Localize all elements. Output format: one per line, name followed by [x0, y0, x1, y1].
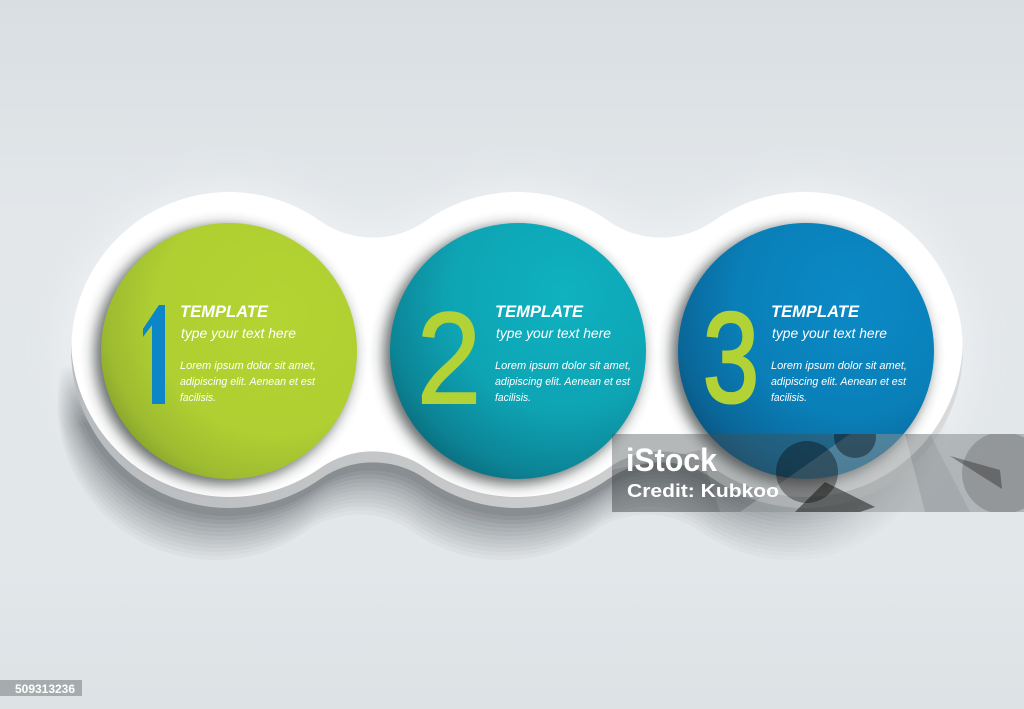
watermark shards — [612, 434, 1024, 512]
panel face — [60, 180, 980, 497]
step 3 body — [771, 360, 907, 404]
watermark band — [612, 434, 1024, 512]
credit text: Credit: Kubkoo — [627, 481, 779, 501]
step 2 circle — [384, 223, 646, 484]
step 2 body: Lorem ipsum dolor sit amet, — [495, 360, 631, 372]
circle shadow — [384, 226, 642, 484]
step 1 heading: TEMPLATE — [180, 303, 269, 321]
white connected panel — [60, 180, 980, 508]
image id tag — [0, 680, 82, 696]
step 2 body — [495, 360, 631, 404]
panel edge — [71, 192, 963, 508]
step 1 body: facilisis. — [180, 392, 216, 404]
circle shadow — [95, 226, 353, 484]
tag background — [0, 680, 82, 696]
tag number: 509313236 — [15, 684, 75, 696]
step 3 body: facilisis. — [771, 392, 807, 404]
step 1 body — [180, 360, 316, 404]
number 2: 2 — [417, 285, 481, 431]
blue disc — [678, 223, 934, 479]
teal disc — [390, 223, 646, 479]
step 1 body: Lorem ipsum dolor sit amet, — [180, 360, 316, 372]
number 1: 1 — [118, 274, 201, 442]
step 3 heading: TEMPLATE — [771, 303, 860, 321]
step 2 body: adipiscing elit. Aenean et est — [495, 376, 631, 388]
step 1 body: adipiscing elit. Aenean et est — [180, 376, 316, 388]
number 3: 3 — [703, 287, 759, 430]
iStock logo text: iStock — [626, 442, 717, 478]
step 1 circle — [95, 223, 357, 484]
step 3 body: Lorem ipsum dolor sit amet, — [771, 360, 907, 372]
step 1 subtitle: type your text here — [181, 326, 296, 341]
step 2 subtitle: type your text here — [496, 326, 611, 341]
step 2 body: facilisis. — [495, 392, 531, 404]
step 2 heading: TEMPLATE — [495, 303, 584, 321]
green disc — [101, 223, 357, 479]
soft glow around shape — [71, 192, 963, 508]
step 3 subtitle: type your text here — [772, 326, 887, 341]
step 3 circle — [672, 223, 934, 484]
stepped shadow under shape — [58, 370, 920, 556]
step 3 body: adipiscing elit. Aenean et est — [771, 376, 907, 388]
circle shadow — [672, 226, 930, 484]
